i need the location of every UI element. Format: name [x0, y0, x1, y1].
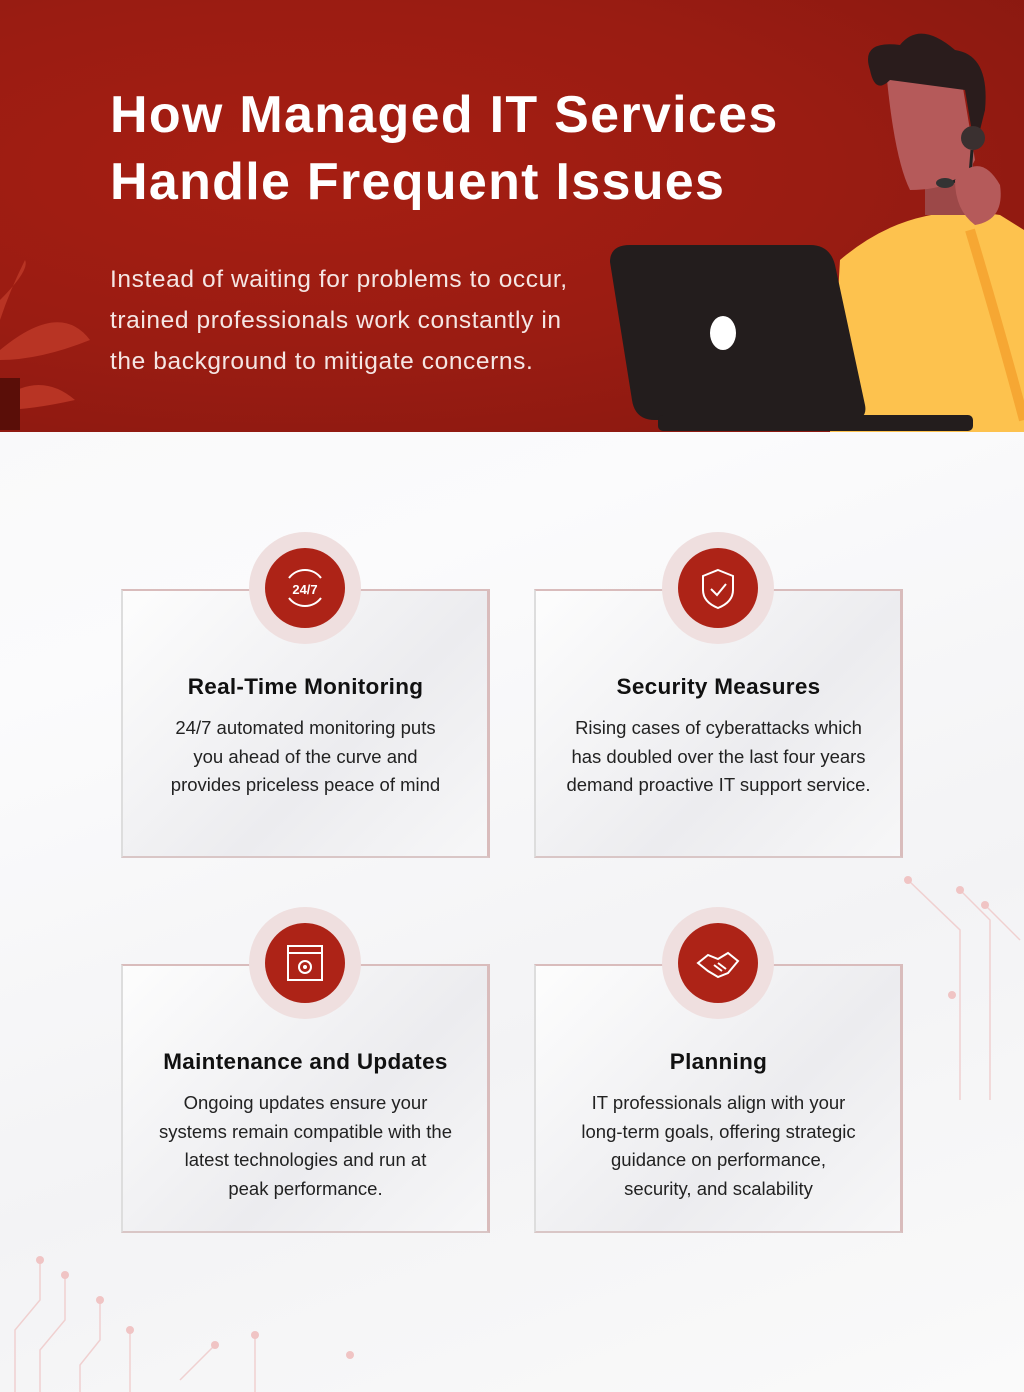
card: Real-Time Monitoring: [121, 589, 490, 858]
text: Maintenance and Updates: Ongoing updates ensure your: [184, 1092, 427, 1113]
card: Planning: [534, 964, 903, 1233]
icon: settings window: [249, 907, 361, 1019]
text: Security Measures: Security Measures: [617, 674, 820, 699]
text: Real-Time Monitoring: provides priceless peace of mind: [171, 774, 440, 795]
text: Planning: guidance on performance,: [611, 1149, 826, 1170]
text: Security Measures: demand proactive IT support service.: [566, 774, 871, 795]
text: Real-Time Monitoring: 24/7 automated monitoring puts: [175, 717, 436, 738]
text: Security Measures: has doubled over the last four years: [571, 746, 866, 766]
text: Planning: long-term goals, offering strategic: [581, 1120, 856, 1142]
card: Maintenance and Updates: [121, 964, 490, 1233]
text: Real-Time Monitoring: Real-Time Monitoring: [188, 674, 423, 699]
subtitle: [110, 266, 568, 375]
decorative circuit lines: [14, 1256, 354, 1392]
text: Maintenance and Updates: Maintenance and Updates: [163, 1049, 448, 1074]
text: Real-Time Monitoring: you ahead of the curve and: [193, 746, 418, 766]
title: How Managed IT Services: [110, 86, 779, 144]
illustration: support agent with laptop: [610, 34, 1024, 432]
text: Planning: IT professionals align with your: [592, 1092, 845, 1113]
text: Security Measures: Rising cases of cyberattacks which: [575, 717, 862, 738]
text: Maintenance and Updates: latest technologies and run at: [185, 1149, 426, 1170]
text: Planning: [581, 1049, 856, 1199]
text: Planning: security, and scalability: [624, 1178, 813, 1198]
subtitle: Instead of waiting for problems to occur,: [110, 266, 568, 293]
icon: 24/7: 24/7: [292, 582, 318, 597]
title: Handle Frequent Issues: [110, 153, 725, 211]
icon: shield: [662, 532, 774, 644]
text: Maintenance and Updates: peak performance.: [228, 1178, 383, 1198]
text: Maintenance and Updates: [159, 1049, 452, 1199]
text: Security Measures: [566, 674, 871, 795]
header banner: [0, 0, 1024, 432]
icon: handshake: [662, 907, 774, 1019]
text: Maintenance and Updates: systems remain compatible with the: [159, 1120, 452, 1142]
card: Security Measures: [534, 589, 903, 858]
icon: 24/7: [249, 532, 361, 644]
decorative leaves: [0, 260, 90, 430]
subtitle: the background to mitigate concerns.: [110, 348, 533, 375]
subtitle: trained professionals work constantly in: [110, 307, 562, 334]
title: [110, 86, 779, 211]
text: Planning: Planning: [670, 1049, 767, 1074]
text: Real-Time Monitoring: [171, 674, 440, 795]
